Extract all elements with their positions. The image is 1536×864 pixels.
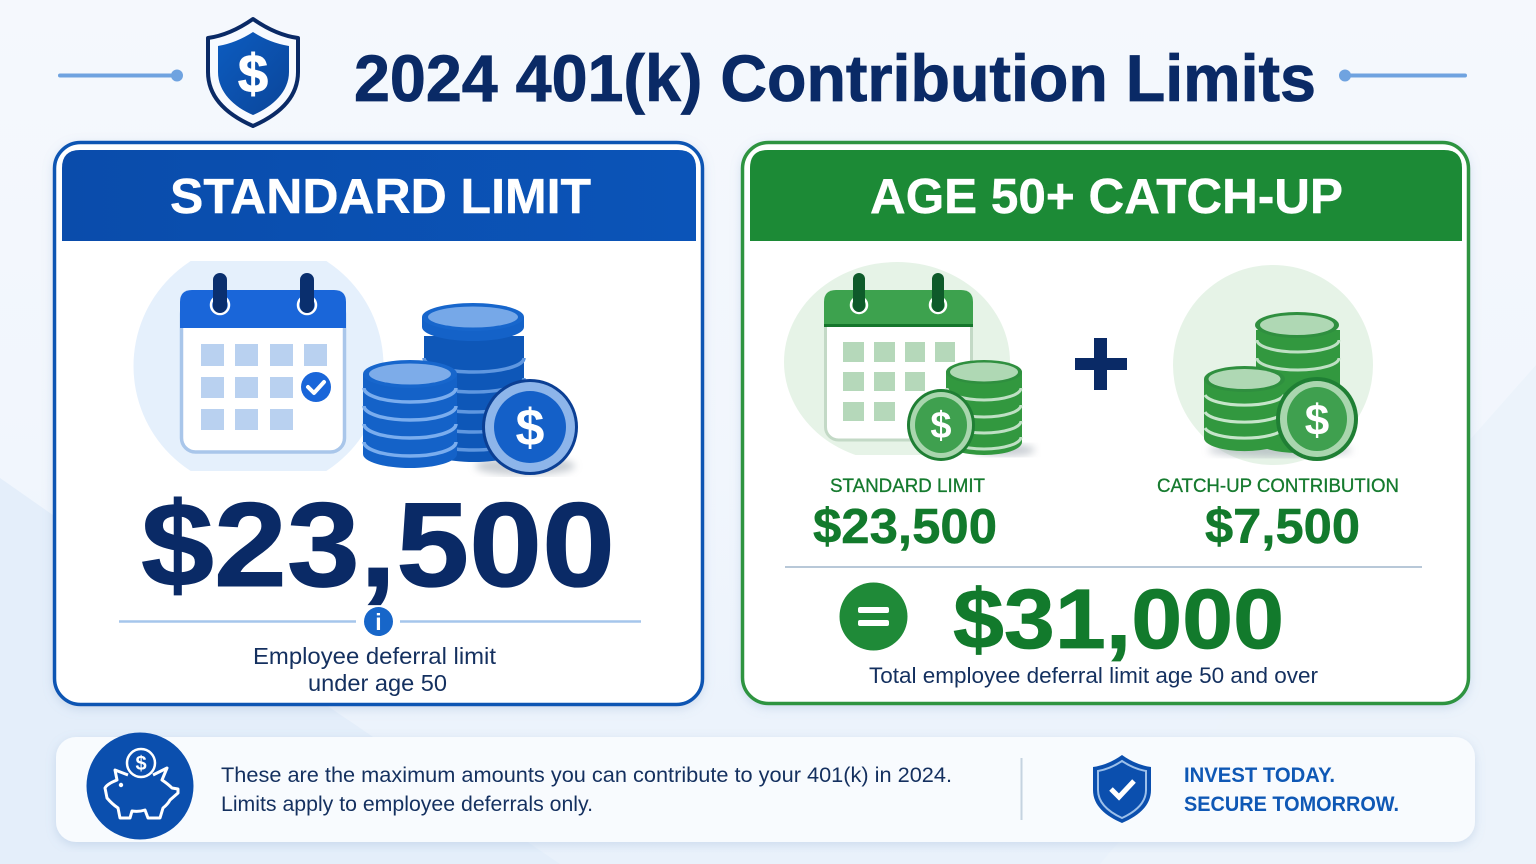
slogan: INVEST TODAY. [1184,764,1335,787]
footer note [221,763,952,816]
divider with info icon [119,607,641,636]
footer note: Limits apply to employee deferrals only. [221,792,593,816]
caption: total limit: Total employee deferral limit age 50 and over [869,663,1318,688]
amount: $23,500 standard: $23,500 [813,500,997,554]
footer bar [56,732,1475,842]
icon: blue coin stacks: $ [516,399,545,457]
panel header: catch-up: AGE 50+ CATCH-UP [870,170,1343,224]
icon: check shield [1093,755,1151,823]
icon: blue coin stacks [363,303,578,475]
slogan: SECURE TOMORROW. [1184,793,1399,816]
panel header: standard limit: STANDARD LIMIT [170,170,591,224]
panel: standard limit [54,142,702,704]
caption: employee deferral limit: Employee deferral limit [253,643,497,669]
icon: green coin stacks [1173,265,1373,465]
icon: dollar shield [208,19,298,126]
footer note: These are the maximum amounts you can contribute to your 401(k) in 2024. [221,763,952,787]
plus sign [1075,338,1127,390]
divider with info icon: i [375,609,382,635]
icon: green coin stacks: $ [1305,396,1329,445]
title decoration: left line [60,70,183,82]
icon: piggy bank: $ [135,753,147,775]
label: catch-up contribution: CATCH-UP CONTRIBUTION [1157,476,1399,497]
label: standard limit: STANDARD LIMIT [830,476,985,497]
icon: green calendar with coins: $ [930,405,952,447]
caption: employee deferral limit: under age 50 [308,670,447,696]
title decoration: right line [1339,70,1465,82]
icon: green calendar with coins [784,262,1035,462]
amount: $7,500 catch-up: $7,500 [1205,500,1360,554]
icon: equals sign [840,582,908,650]
slogan [1184,764,1399,816]
icon: piggy bank [86,732,194,840]
panel header: catch-up [750,150,1462,241]
amount: $23,500: $23,500 [141,478,615,612]
total amount: $31,000: $31,000 [953,572,1284,666]
panel header: standard limit [62,150,696,241]
icon: dollar shield: $ [238,44,268,104]
caption: employee deferral limit [253,643,497,696]
title: 2024 401(k) Contribution Limits [354,41,1316,115]
panel: age 50+ catch-up [742,142,1468,704]
icon: blue calendar [134,261,384,471]
